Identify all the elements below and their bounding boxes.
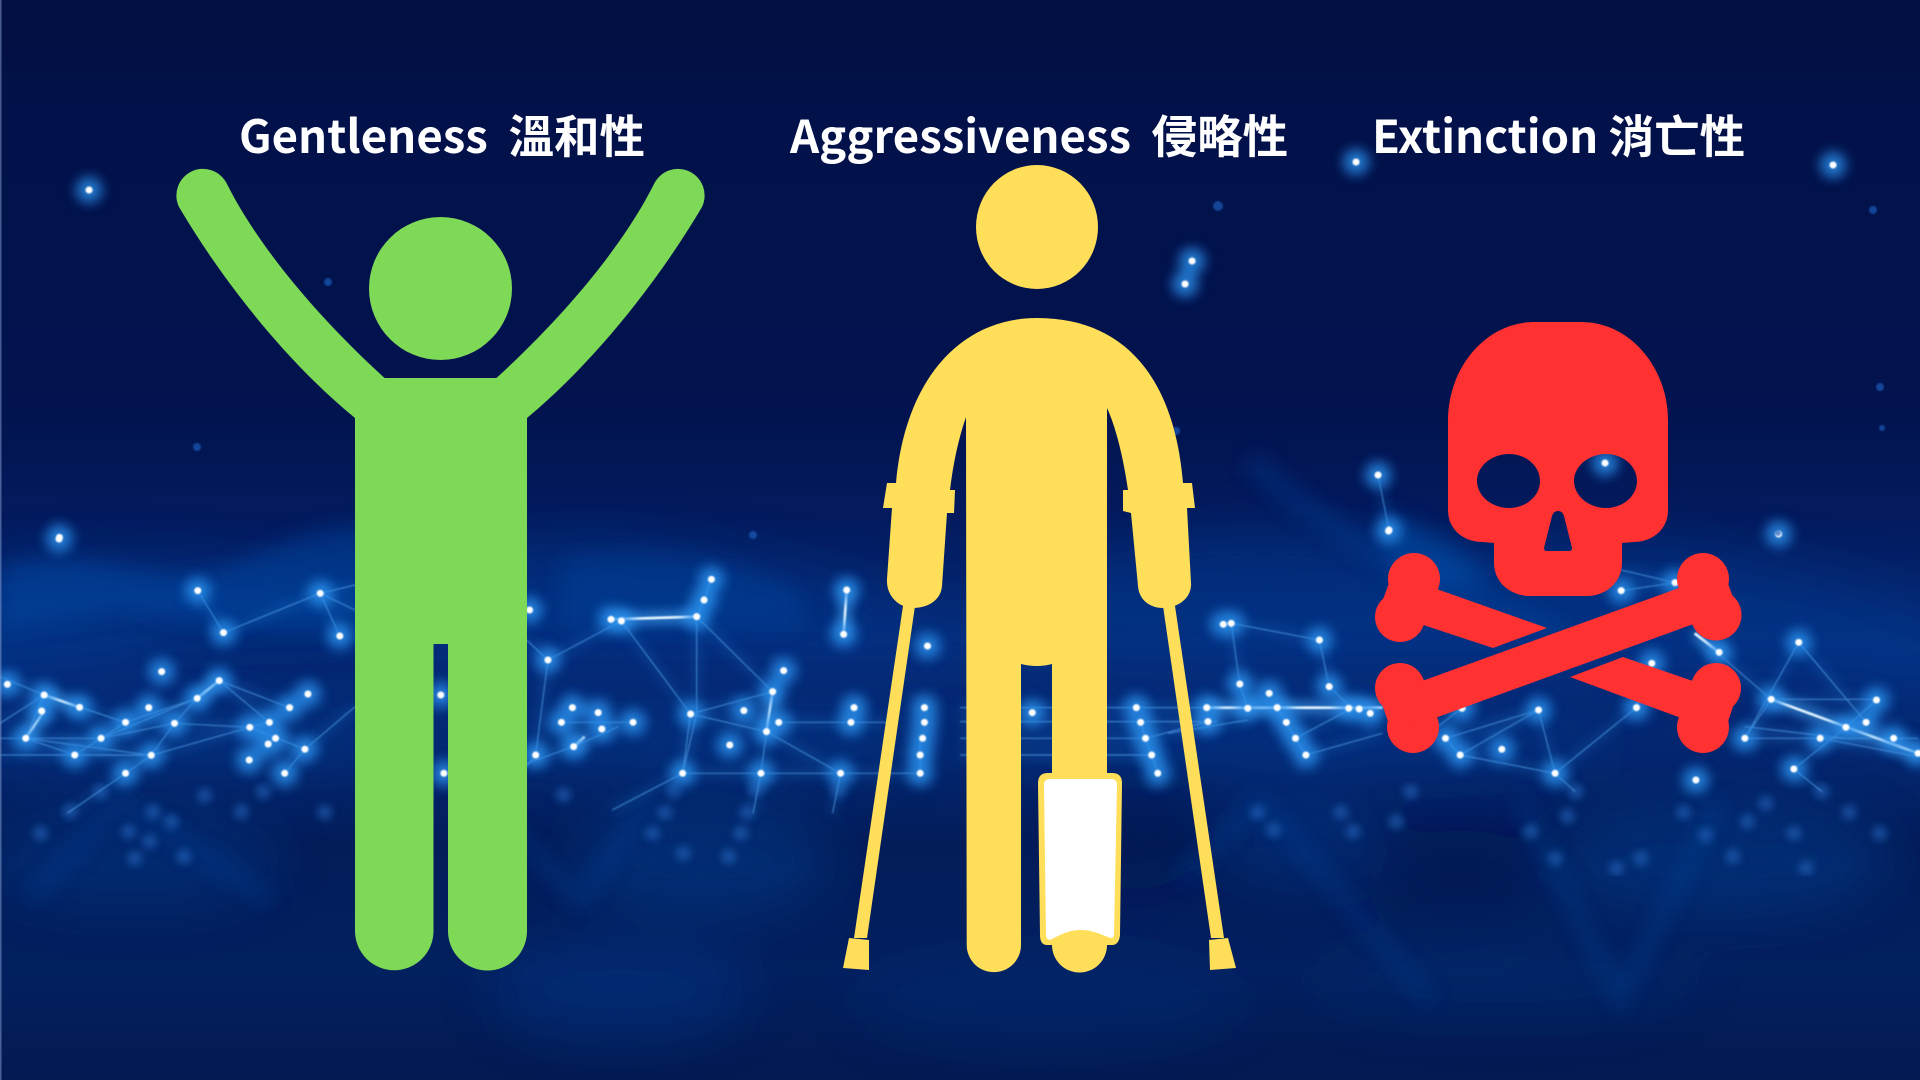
bone: lower-left to upper-right	[1375, 553, 1742, 753]
panel: gentleness	[176, 101, 705, 970]
panel: extinction	[1372, 101, 1745, 753]
panel: aggressiveness	[789, 101, 1288, 972]
heading: Extinction: Extinction 消亡性	[1372, 101, 1745, 167]
heading: Gentleness: Gentleness 溫和性	[239, 101, 645, 167]
icon: red skull and crossbones	[1375, 322, 1742, 753]
bone: upper-left to lower-right	[1375, 553, 1741, 753]
icon: green person with raised arms	[176, 169, 705, 971]
heading: Aggressiveness: Aggressiveness 侵略性	[789, 101, 1288, 167]
icon: yellow injured person on crutches	[843, 165, 1236, 972]
